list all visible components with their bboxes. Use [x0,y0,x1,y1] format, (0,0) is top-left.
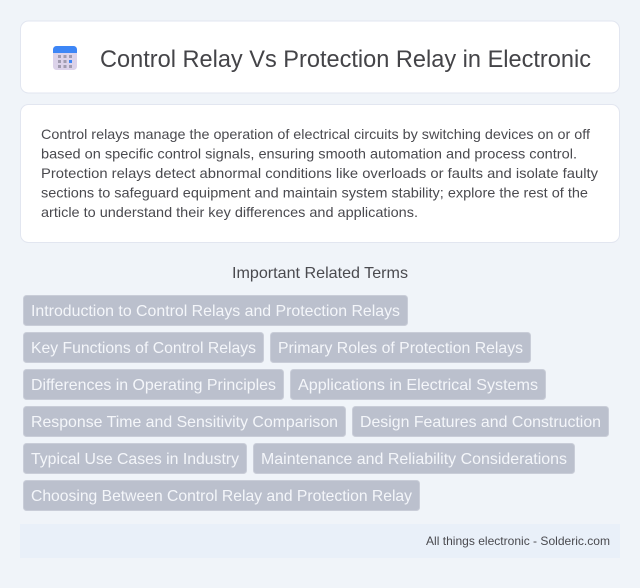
icon: calendar [53,46,77,70]
tag [254,444,574,474]
footer: All things electronic - Solderic.com [426,534,610,548]
panel: summary [20,104,620,242]
text block: summary paragraph: sections to safeguard equipment and maintain system stability; explore the rest of the [41,184,588,200]
tag [352,406,608,436]
footer [20,524,620,558]
tag list [24,296,608,510]
tag: Typical Use Cases in Industry [31,451,239,468]
tag: Applications in Electrical Systems [298,377,538,394]
text block: summary paragraph: article to understand their key differences and applications. [41,204,418,220]
tag: Response Time and Sensitivity Comparison [31,414,338,431]
tag [24,406,346,436]
tag [270,332,530,362]
text block: summary paragraph: Control relays manage the operation of electrical circuits by switching devices on or off [41,126,590,142]
tag [290,370,546,400]
tag [24,480,420,510]
heading: related terms: Important Related Terms [232,265,408,282]
tag: Key Functions of Control Relays [31,340,256,357]
text block: summary paragraph: based on specific control signals, ensuring smooth automation and process control. [41,146,577,162]
title: Control Relay Vs Protection Relay in Electronic [100,46,591,73]
tag: Primary Roles of Protection Relays [278,340,523,357]
panel: header [20,21,620,93]
tag [24,332,264,362]
tag [24,296,408,326]
tag: Choosing Between Control Relay and Protection Relay [31,488,412,505]
tag: Introduction to Control Relays and Protection Relays [31,303,400,320]
tag [24,370,284,400]
tag: Maintenance and Reliability Considerations [261,451,567,468]
tag [24,444,246,474]
tag: Differences in Operating Principles [31,377,276,394]
tag: Design Features and Construction [360,414,601,431]
text block: summary paragraph: Protection relays detect abnormal conditions like overloads or faults and isolate faulty [41,165,598,181]
text block: summary paragraph [41,126,598,220]
